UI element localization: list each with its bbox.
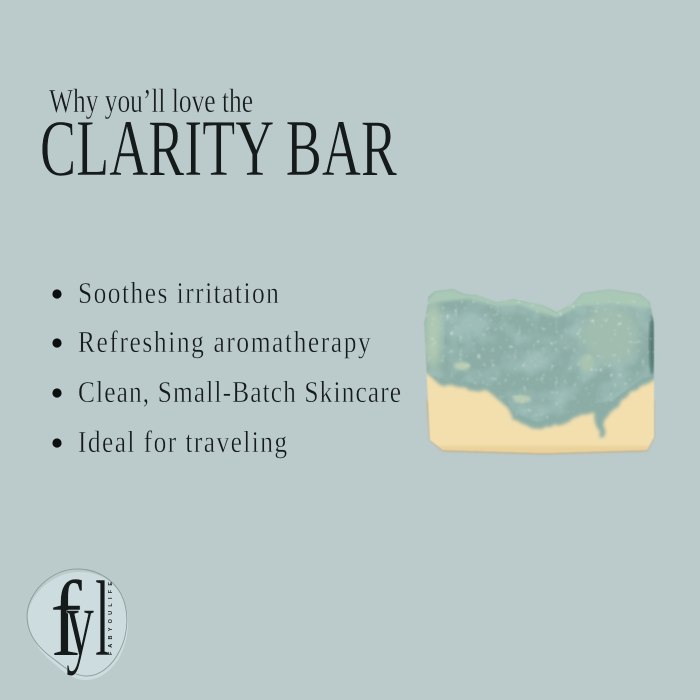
subtitle: Why you’ll love the xyxy=(49,83,253,120)
logo monogram: y xyxy=(66,569,94,676)
bullet: soothes irritation: Soothes irritation xyxy=(78,277,279,311)
bullet: refreshing aromatherapy: Refreshing aromatherapy xyxy=(78,326,371,360)
benefits list xyxy=(52,277,401,460)
logo monogram xyxy=(50,560,110,679)
logo: l xyxy=(95,560,110,679)
logo xyxy=(27,560,128,680)
bullet: ideal for traveling: Ideal for traveling xyxy=(78,426,287,460)
logo wordmark: FABYOULIFE xyxy=(108,582,114,655)
bullet: clean skincare: Clean, Small-Batch Skincare xyxy=(78,376,401,410)
soap bar photo xyxy=(424,288,656,456)
title: CLARITY BAR xyxy=(40,105,397,193)
logo badge blob xyxy=(27,569,128,680)
logo monogram: f xyxy=(50,560,82,679)
